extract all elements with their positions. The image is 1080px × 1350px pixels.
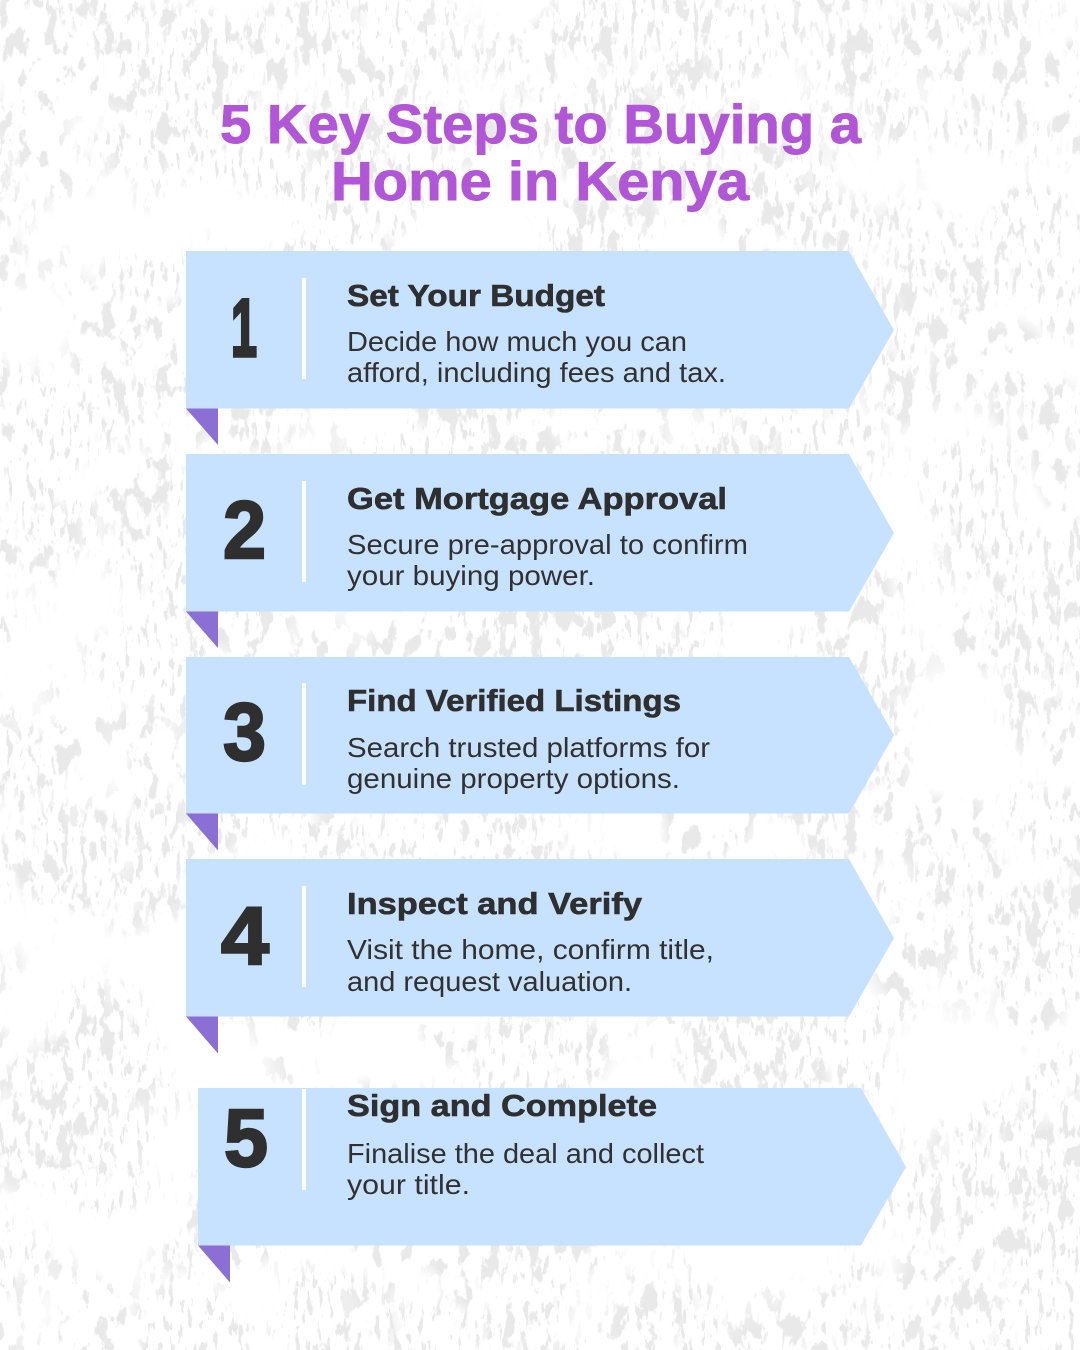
panel: step 1 bbox=[186, 251, 894, 445]
step 3 arrow band bbox=[186, 657, 894, 814]
step 3 heading: Find Verified Listings bbox=[347, 683, 681, 718]
step 2 heading: Get Mortgage Approval bbox=[347, 481, 727, 516]
step 5 description: Finalise the deal and collect bbox=[347, 1138, 704, 1169]
step 3 description bbox=[347, 732, 710, 794]
step 1 number: 1 bbox=[231, 283, 257, 374]
step 2 divider bbox=[302, 481, 306, 582]
step 2 description: Secure pre-approval to confirm bbox=[347, 529, 748, 560]
step 4 description: Visit the home, confirm title, bbox=[347, 934, 714, 965]
step 5 fold bbox=[198, 1246, 230, 1282]
step 1 arrow band bbox=[186, 251, 894, 408]
panel: step 3 bbox=[186, 657, 894, 850]
step 2 description: your buying power. bbox=[347, 560, 595, 591]
step 4 divider bbox=[302, 886, 306, 987]
step 5 number: 5 bbox=[224, 1093, 268, 1184]
step 1 description bbox=[347, 326, 726, 388]
step 1 divider bbox=[302, 278, 306, 379]
step 3 description: genuine property options. bbox=[347, 763, 680, 794]
step 2 number: 2 bbox=[223, 485, 266, 576]
step 5 arrow band bbox=[198, 1088, 906, 1246]
step 2 fold bbox=[186, 612, 218, 648]
step 4 arrow band bbox=[186, 859, 894, 1016]
step 1 heading: Set Your Budget bbox=[347, 278, 605, 313]
step 4 heading: Inspect and Verify bbox=[347, 886, 643, 921]
title: Home in Kenya bbox=[331, 150, 749, 212]
step 3 fold bbox=[186, 814, 218, 850]
panel: step 4 bbox=[186, 859, 894, 1054]
step 2 description bbox=[347, 529, 748, 591]
step 3 number: 3 bbox=[223, 687, 266, 778]
step 4 description: and request valuation. bbox=[347, 966, 632, 997]
step 4 description bbox=[347, 934, 714, 997]
title: 5 Key Steps to Buying a bbox=[220, 93, 861, 155]
step 5 heading: Sign and Complete bbox=[347, 1088, 657, 1123]
step 3 divider bbox=[302, 683, 306, 785]
step 5 divider bbox=[302, 1089, 306, 1190]
panel: step 2 bbox=[186, 454, 894, 648]
step 1 fold bbox=[186, 408, 218, 445]
step 1 description: Decide how much you can bbox=[347, 326, 687, 357]
step 4 fold bbox=[186, 1016, 218, 1054]
step 4 number: 4 bbox=[221, 891, 269, 982]
step 2 arrow band bbox=[186, 454, 894, 612]
step 1 description: afford, including fees and tax. bbox=[347, 357, 726, 388]
panel: step 5 bbox=[198, 1088, 906, 1282]
step 5 description: your title. bbox=[347, 1169, 470, 1200]
step 3 description: Search trusted platforms for bbox=[347, 732, 710, 763]
title bbox=[220, 93, 861, 212]
step 5 description bbox=[347, 1138, 704, 1200]
